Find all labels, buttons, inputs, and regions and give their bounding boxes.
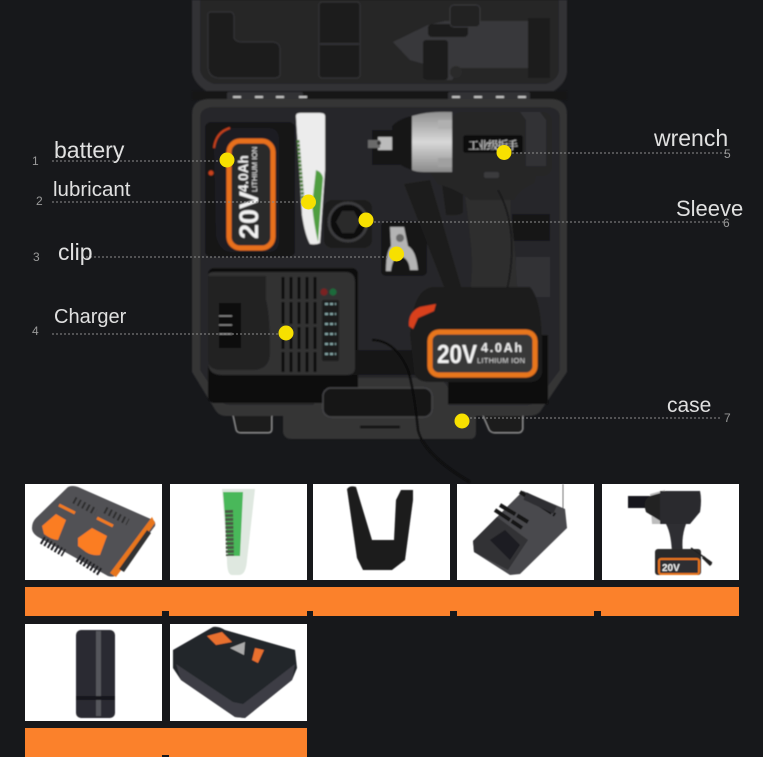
battery on wrench: 4.0Ah [481,341,522,355]
product: closed case [173,627,297,718]
callout numbers: 3 [33,250,40,264]
orange caption bars [25,587,739,757]
grip [463,182,518,295]
battery in case, vertical: 20V [234,191,264,239]
callout labels: battery [54,137,125,163]
callout labels: Charger [54,306,127,328]
callout numbers [32,147,731,425]
lubricant tube in case [296,113,325,244]
charger in case [208,272,355,375]
case base [192,99,567,439]
product: twin batteries [32,486,155,577]
product: wrench: 20V [662,563,680,574]
callout labels: wrench [653,125,728,151]
callout numbers: 1 [32,154,39,168]
battery in case, vertical: LITHIUM ION [250,147,259,192]
socket in case [329,203,367,241]
callout labels: clip [58,239,93,265]
case lid [192,0,567,92]
callout labels [53,125,743,417]
hinges [192,91,567,102]
case latches [233,416,272,433]
wrench in case [368,112,552,295]
product: socket [76,630,115,718]
parts grid white tiles [25,484,739,721]
product: charger [473,484,567,575]
foam recess beside grip [404,180,462,292]
callout numbers: 2 [36,194,43,208]
callout labels: Sleeve [676,196,743,221]
callout numbers: 6 [723,216,730,230]
belt clip in case [386,227,418,271]
battery on wrench [409,287,542,382]
battery in case, vertical: 4.0Ah [236,155,251,192]
callout numbers: 4 [32,324,39,338]
callout numbers: 7 [724,411,731,425]
callout labels: case [667,394,711,417]
open tool case [192,0,567,482]
battery on wrench: 20V [437,339,478,369]
product: lubricant tube [222,489,255,575]
leader lines [52,153,730,418]
wrench in case: 工业级扳手 [468,138,518,152]
charger cord [372,340,470,482]
marker dots [220,145,512,428]
callout numbers: 5 [724,147,731,161]
product: belt clip [347,486,413,570]
battery in case, vertical [208,128,279,252]
battery on wrench: LITHIUM ION [477,356,525,365]
product: wrench [628,490,712,575]
callout labels: lubricant [53,178,131,201]
